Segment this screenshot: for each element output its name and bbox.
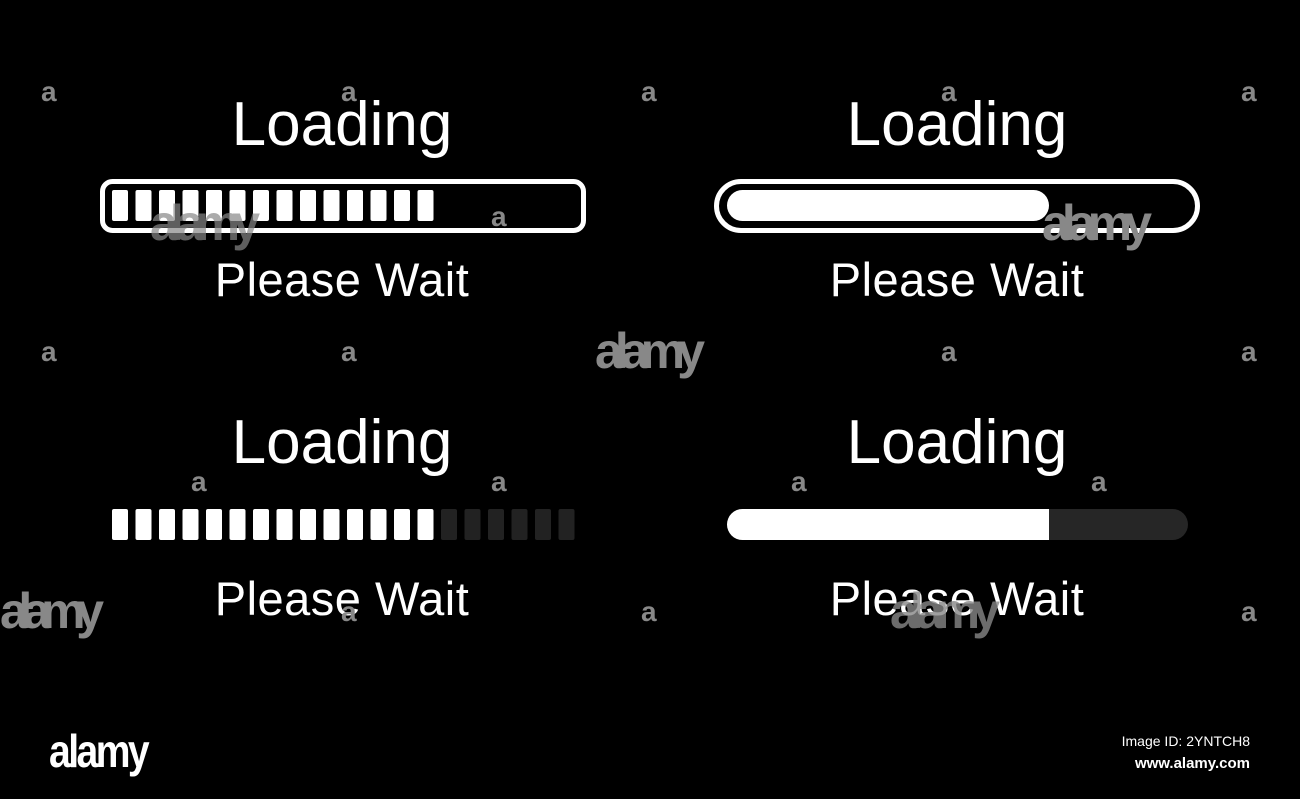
bar: pill outlined [716, 182, 1198, 230]
bar: pill plain [727, 509, 1188, 540]
watermarks: a [1241, 596, 1257, 627]
watermarks [0, 76, 1257, 639]
watermarks: a [641, 596, 657, 627]
watermarks: a [1241, 76, 1257, 107]
watermarks: a [941, 336, 957, 367]
bar: segmented plain [112, 509, 574, 540]
text: please wait bottom-right: Please Wait [830, 572, 1084, 625]
text: please wait top-left: Please Wait [215, 253, 469, 306]
bar: segmented outlined [102, 182, 584, 230]
text: please wait bottom-left: Please Wait [215, 572, 469, 625]
watermarks: alamy [1042, 195, 1152, 251]
watermarks: alamy [890, 583, 1000, 639]
watermarks: a [341, 596, 357, 627]
text: please wait top-right: Please Wait [830, 253, 1084, 306]
watermarks: alamy [595, 323, 705, 379]
watermarks: alamy [150, 195, 260, 251]
watermarks: a [41, 76, 57, 107]
watermarks: a [341, 336, 357, 367]
watermarks: a [791, 466, 807, 497]
text: image id: Image ID: 2YNTCH8 [1122, 733, 1250, 749]
watermarks: a [41, 336, 57, 367]
watermarks: a [191, 466, 207, 497]
watermarks: a [641, 76, 657, 107]
text: url: www.alamy.com [1135, 755, 1250, 772]
watermarks: a [341, 76, 357, 107]
watermarks: alamy [0, 583, 104, 639]
logo: alamy: alamy [49, 725, 147, 777]
title: bottom-right loading: Loading [847, 408, 1067, 477]
watermarks: a [1241, 336, 1257, 367]
title: bottom-left loading: Loading [232, 408, 452, 477]
watermarks: a [491, 466, 507, 497]
watermarks: a [941, 76, 957, 107]
watermarks: a [491, 201, 507, 232]
watermarks: a [1091, 466, 1107, 497]
title: top-right loading: Loading [847, 90, 1067, 159]
title: top-left loading: Loading [232, 90, 452, 159]
